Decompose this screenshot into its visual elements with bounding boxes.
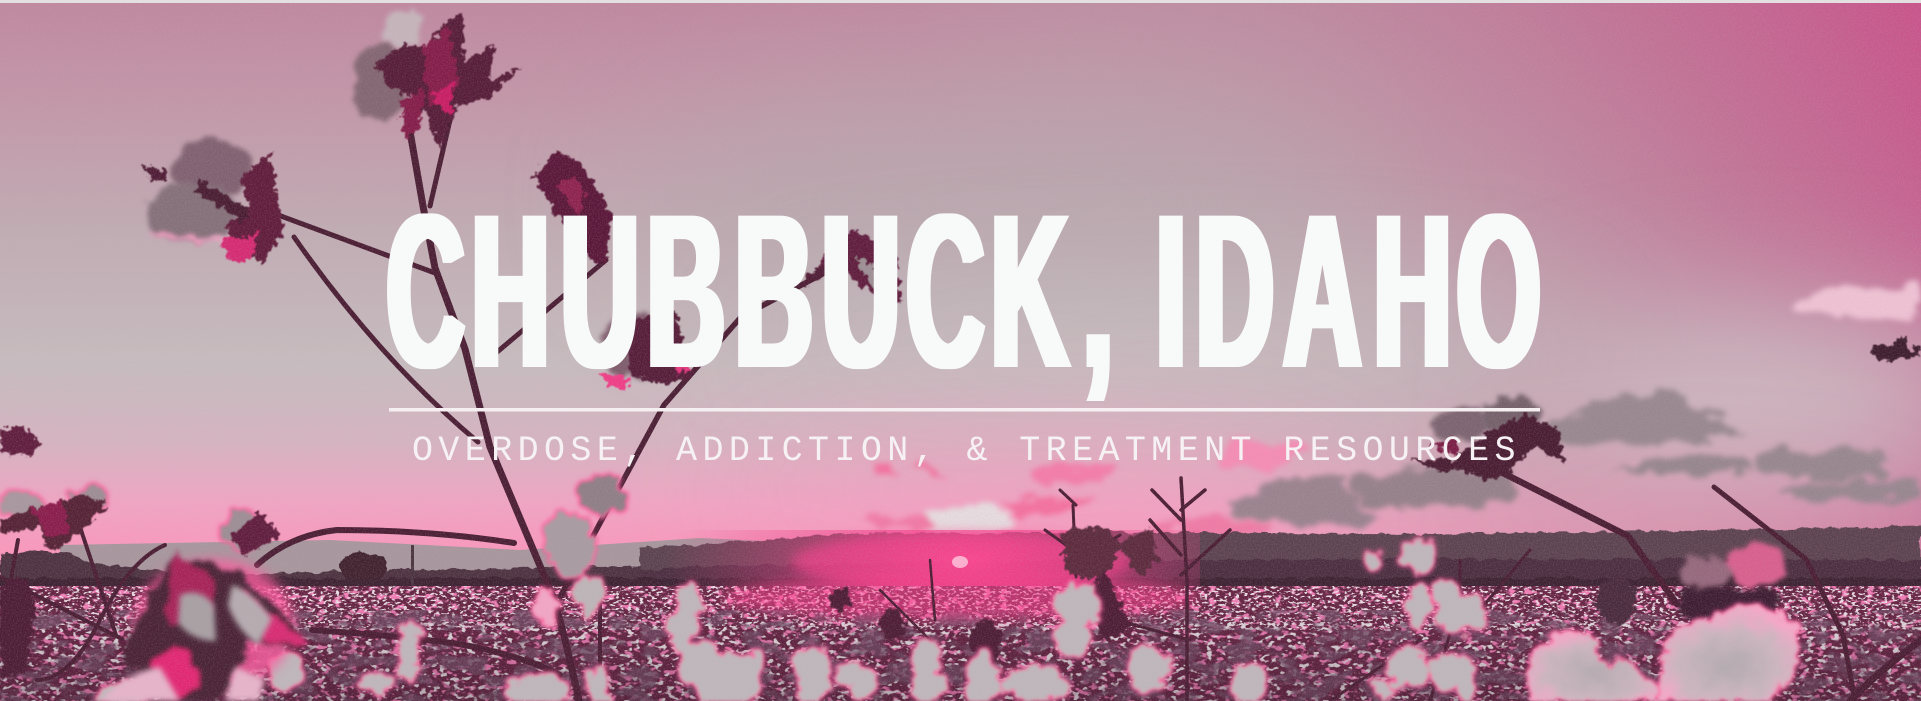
title: CHUBBUCK, IDAHO xyxy=(387,168,1541,414)
cotton pod below the title xyxy=(600,310,690,390)
title rule xyxy=(389,408,1540,412)
top cotton flower xyxy=(352,8,523,151)
cotton bolls on main stem xyxy=(0,475,624,625)
clouds xyxy=(860,277,1921,550)
left cotton flower xyxy=(142,138,284,264)
far right bud xyxy=(1872,335,1921,363)
open pink petal flower xyxy=(1678,543,1785,625)
large blurred foreground flower xyxy=(100,552,310,701)
pod behind letter U xyxy=(806,230,902,302)
field plants: dark buds xyxy=(0,526,1637,680)
center cotton pod xyxy=(534,151,612,265)
subtitle: OVERDOSE, ADDICTION, & TREATMENT RESOURCES xyxy=(412,431,1521,471)
small cotton bolls in the field xyxy=(96,540,1484,701)
cotton field xyxy=(0,576,1921,701)
top edge strip xyxy=(0,0,1921,3)
large foreground cotton bolls xyxy=(1529,610,1796,701)
right stem flower xyxy=(1410,397,1564,480)
far left cotton flowers xyxy=(0,424,282,556)
horizon: hills and tree line xyxy=(0,526,1921,596)
